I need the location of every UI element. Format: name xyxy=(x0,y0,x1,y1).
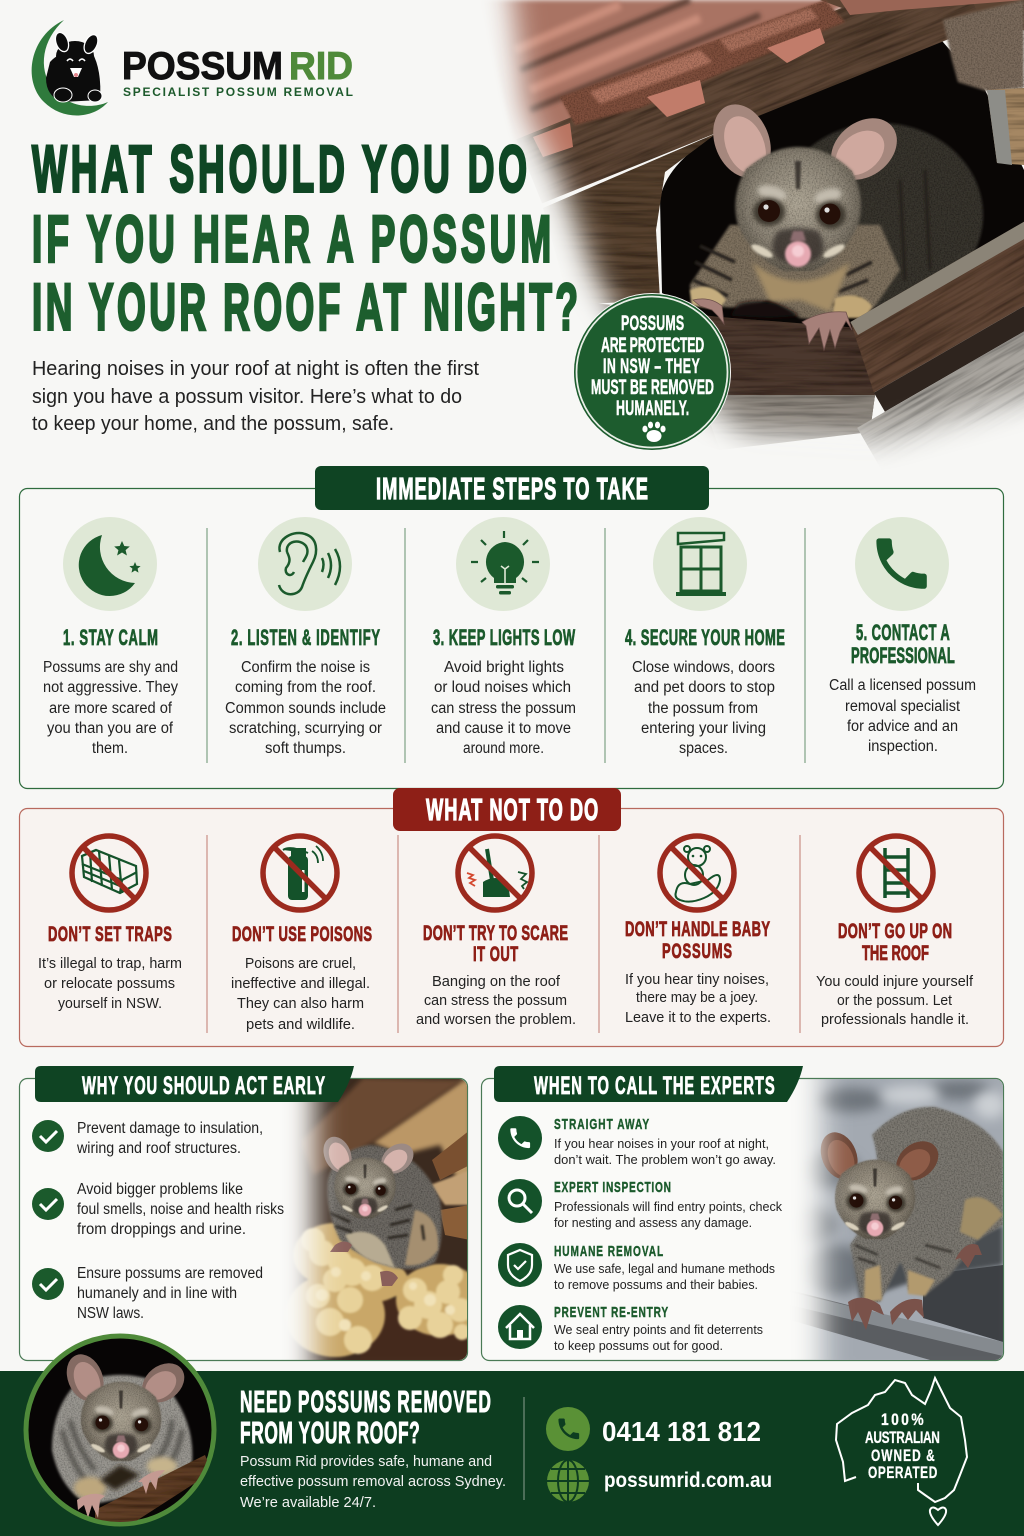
step: expert inspection: EXPERT INSPECTION xyxy=(554,1179,671,1195)
main title: IN YOUR ROOF AT NIGHT? xyxy=(32,272,578,344)
step 1: stay calm: are more scared of xyxy=(49,700,173,717)
reason: avoid bigger problems: foul smells, noise and health risks xyxy=(77,1201,284,1218)
australia badge: AUSTRALIAN xyxy=(865,1429,940,1448)
item: don't use poisons xyxy=(231,836,372,1033)
item: don't handle baby possums: Leave it to the experts. xyxy=(625,1009,771,1026)
phone contact: 0414 181 812 xyxy=(602,1416,761,1447)
call to action heading: FROM YOUR ROOF? xyxy=(240,1416,420,1450)
call to action heading: NEED POSSUMS REMOVED xyxy=(240,1385,491,1419)
step: expert inspection: for nesting and assess any damage. xyxy=(554,1215,752,1230)
website contact: possumrid.com.au xyxy=(604,1469,772,1492)
australia badge: OWNED & xyxy=(871,1447,935,1466)
footer band xyxy=(0,1336,1024,1536)
step 4: secure your home: entering your living xyxy=(641,720,766,737)
badge: possums are protected: HUMANELY. xyxy=(616,396,689,420)
possum body xyxy=(328,1145,442,1269)
step: straight away: STRAIGHT AWAY xyxy=(554,1116,650,1132)
australia badge: OPERATED xyxy=(868,1464,937,1483)
step 3: keep lights low: around more. xyxy=(463,740,544,757)
item: don't set traps: or relocate possums xyxy=(44,975,175,992)
icon: tasmania heart xyxy=(930,1508,946,1525)
logo xyxy=(32,20,353,116)
step 2: listen and identify: soft thumps. xyxy=(265,740,346,757)
main title: IF YOU HEAR A POSSUM xyxy=(32,204,551,276)
item: don't use poisons: They can also harm xyxy=(237,995,364,1012)
item: don't set traps xyxy=(38,836,182,1012)
reason: prevent damage: wiring and roof structures. xyxy=(76,1140,241,1157)
step 4: secure your home xyxy=(625,517,785,757)
step 4: secure your home: Close windows, doors xyxy=(632,659,775,676)
step: prevent re-entry: to keep possums out for good. xyxy=(554,1338,723,1353)
possum body xyxy=(690,123,983,320)
step 5: contact a professional: removal specialist xyxy=(845,698,961,715)
badge: possums are protected: MUST BE REMOVED xyxy=(591,375,714,399)
logo: RID xyxy=(289,45,353,88)
reason: prevent damage: Prevent damage to insulation, xyxy=(77,1120,263,1137)
step 1: stay calm: them. xyxy=(92,740,128,757)
item: don't set traps: It’s illegal to trap, harm xyxy=(38,955,182,972)
heading: immediate steps: IMMEDIATE STEPS TO TAKE xyxy=(376,472,648,506)
reason: humane removal: NSW laws. xyxy=(77,1305,144,1322)
photo: possum portrait xyxy=(26,1336,214,1525)
step 5: contact a professional: inspection. xyxy=(868,738,938,755)
front plank xyxy=(586,304,875,438)
item: don't set traps: DON’T SET TRAPS xyxy=(48,922,172,946)
phone contact xyxy=(546,1407,761,1451)
possum paws xyxy=(693,299,852,350)
step 2: listen and identify: Confirm the noise is xyxy=(241,659,370,676)
step 2: listen and identify: coming from the roof. xyxy=(235,679,376,696)
step: prevent re-entry xyxy=(498,1304,763,1353)
reason: humane removal xyxy=(32,1265,263,1322)
item: don't try to scare it out xyxy=(416,836,576,1028)
item: don't go up on the roof: THE ROOF xyxy=(862,941,929,965)
call to action text: We’re available 24/7. xyxy=(240,1494,376,1511)
step: expert inspection xyxy=(498,1179,782,1230)
step 3: keep lights low: 3. KEEP LIGHTS LOW xyxy=(433,626,576,650)
step: expert inspection: Professionals will find entry points, check xyxy=(554,1199,782,1214)
item: don't use poisons: ineffective and illegal. xyxy=(231,975,370,992)
step 4: secure your home: 4. SECURE YOUR HOME xyxy=(625,626,785,650)
step 5: contact a professional: 5. CONTACT A xyxy=(856,621,950,645)
heading: when to call: WHEN TO CALL THE EXPERTS xyxy=(534,1072,775,1100)
step 2: listen and identify: 2. LISTEN & IDENTIFY xyxy=(231,626,380,650)
item: don't try to scare it out: DON’T TRY TO SCARE xyxy=(423,921,568,945)
reason: avoid bigger problems: from droppings and urine. xyxy=(77,1221,246,1238)
step 3: keep lights low: and cause it to move xyxy=(436,720,571,737)
hero photo: possum in roof xyxy=(491,0,1024,458)
step 1: stay calm: not aggressive. They xyxy=(43,679,178,696)
item: don't handle baby possums xyxy=(625,836,771,1026)
step: humane removal xyxy=(498,1243,775,1292)
panel: immediate steps xyxy=(20,466,1004,788)
item: don't go up on the roof xyxy=(816,836,974,1028)
step 3: keep lights low: Avoid bright lights xyxy=(444,659,564,676)
badge: possums are protected: IN NSW – THEY xyxy=(603,354,700,378)
item: don't go up on the roof: You could injure yourself xyxy=(816,973,974,990)
badge: possums are protected xyxy=(573,293,731,451)
item: don't handle baby possums: there may be a joey. xyxy=(636,989,758,1006)
step 2: listen and identify: scratching, scurrying or xyxy=(229,720,382,737)
call to action heading xyxy=(240,1385,491,1450)
step 1: stay calm xyxy=(43,517,178,757)
photo: possum in insulation xyxy=(292,1079,467,1360)
reason: humane removal: Ensure possums are removed xyxy=(77,1265,263,1282)
item: don't try to scare it out: Banging on the roof xyxy=(432,973,561,990)
badge: possums are protected: ARE PROTECTED xyxy=(601,333,704,357)
reason: prevent damage xyxy=(32,1120,263,1157)
step 5: contact a professional: Call a licensed possum xyxy=(829,677,976,694)
step: humane removal: to remove possums and their babies. xyxy=(554,1277,758,1292)
item: don't go up on the roof: or the possum. Let xyxy=(837,992,953,1009)
item: don't use poisons: DON’T USE POISONS xyxy=(232,922,372,946)
possum body xyxy=(850,1107,1003,1304)
intro text: to keep your home, and the possum, safe. xyxy=(32,413,394,435)
australia badge xyxy=(836,1378,967,1525)
intro text xyxy=(32,358,479,435)
heading: why act early xyxy=(35,1066,354,1102)
item: don't handle baby possums: DON’T HANDLE BABY xyxy=(625,917,770,941)
heading: what not to do: WHAT NOT TO DO xyxy=(426,793,598,827)
item: don't try to scare it out: can stress the possum xyxy=(424,992,567,1009)
panel: when to call the experts xyxy=(482,1060,1020,1370)
step: straight away: don’t wait. The problem won’t go away. xyxy=(554,1152,776,1167)
heading: why act early: WHY YOU SHOULD ACT EARLY xyxy=(82,1072,325,1100)
intro text: sign you have a possum visitor. Here’s what to do xyxy=(32,386,462,408)
item: don't try to scare it out: IT OUT xyxy=(473,942,519,966)
step 3: keep lights low: or loud noises which xyxy=(434,679,571,696)
logo crescent xyxy=(32,20,108,116)
reason: humane removal: humanely and in line with xyxy=(77,1285,237,1302)
possum head xyxy=(713,104,897,272)
item: don't handle baby possums: If you hear tiny noises, xyxy=(625,971,769,988)
logo possum xyxy=(46,31,102,102)
step: prevent re-entry: We seal entry points and fit deterrents xyxy=(554,1322,763,1337)
main title: WHAT SHOULD YOU DO xyxy=(32,134,527,206)
step 5: contact a professional: for advice and an xyxy=(847,718,958,735)
australia badge: 100% xyxy=(881,1411,924,1429)
call to action text: Possum Rid provides safe, humane and xyxy=(240,1453,492,1470)
step: prevent re-entry: PREVENT RE-ENTRY xyxy=(554,1304,669,1320)
item: don't set traps: yourself in NSW. xyxy=(58,995,162,1012)
item: don't try to scare it out: and worsen the problem. xyxy=(416,1011,576,1028)
icon: paw xyxy=(642,422,666,442)
heading: what not to do xyxy=(393,788,621,831)
step 2: listen and identify xyxy=(225,517,386,757)
reason: avoid bigger problems xyxy=(32,1181,284,1238)
logo wordmark: POSSUM xyxy=(122,45,283,88)
panel: why you should act early xyxy=(20,1060,484,1370)
logo tagline: SPECIALIST POSSUM REMOVAL xyxy=(123,85,353,99)
item: don't go up on the roof: professionals handle it. xyxy=(821,1011,969,1028)
website contact xyxy=(547,1460,772,1502)
step 1: stay calm: you than you are of xyxy=(47,720,174,737)
panel: what not to do xyxy=(20,788,1004,1046)
intro text: Hearing noises in your roof at night is often the first xyxy=(32,358,479,380)
step: straight away: If you hear noises in your roof at night, xyxy=(554,1136,769,1151)
step 4: secure your home: and pet doors to stop xyxy=(634,679,775,696)
heading: immediate steps xyxy=(315,466,709,510)
photo: possum on roof tiles xyxy=(800,1079,1003,1360)
step 1: stay calm: 1. STAY CALM xyxy=(63,626,158,650)
heading: when to call xyxy=(494,1066,803,1102)
step 2: listen and identify: Common sounds include xyxy=(225,700,386,717)
step 3: keep lights low xyxy=(431,517,576,757)
step 4: secure your home: spaces. xyxy=(679,740,728,757)
step 3: keep lights low: can stress the possum xyxy=(431,700,576,717)
main title xyxy=(32,134,578,344)
badge: possums are protected: POSSUMS xyxy=(621,311,684,335)
item: don't use poisons: pets and wildlife. xyxy=(246,1016,355,1033)
step 5: contact a professional xyxy=(829,517,976,755)
step: humane removal: HUMANE REMOVAL xyxy=(554,1243,663,1259)
step 5: contact a professional: PROFESSIONAL xyxy=(851,644,955,668)
call to action text: effective possum removal across Sydney. xyxy=(240,1473,506,1490)
step 4: secure your home: the possum from xyxy=(648,700,758,717)
step 1: stay calm: Possums are shy and xyxy=(43,659,178,676)
call to action text xyxy=(240,1453,506,1511)
step: humane removal: We use safe, legal and humane methods xyxy=(554,1261,775,1276)
reason: avoid bigger problems: Avoid bigger problems like xyxy=(77,1181,243,1198)
item: don't handle baby possums: POSSUMS xyxy=(662,939,732,963)
insulation xyxy=(294,1222,467,1358)
step: straight away xyxy=(498,1116,776,1167)
item: don't go up on the roof: DON’T GO UP ON xyxy=(838,919,952,943)
item: don't use poisons: Poisons are cruel, xyxy=(245,955,356,972)
